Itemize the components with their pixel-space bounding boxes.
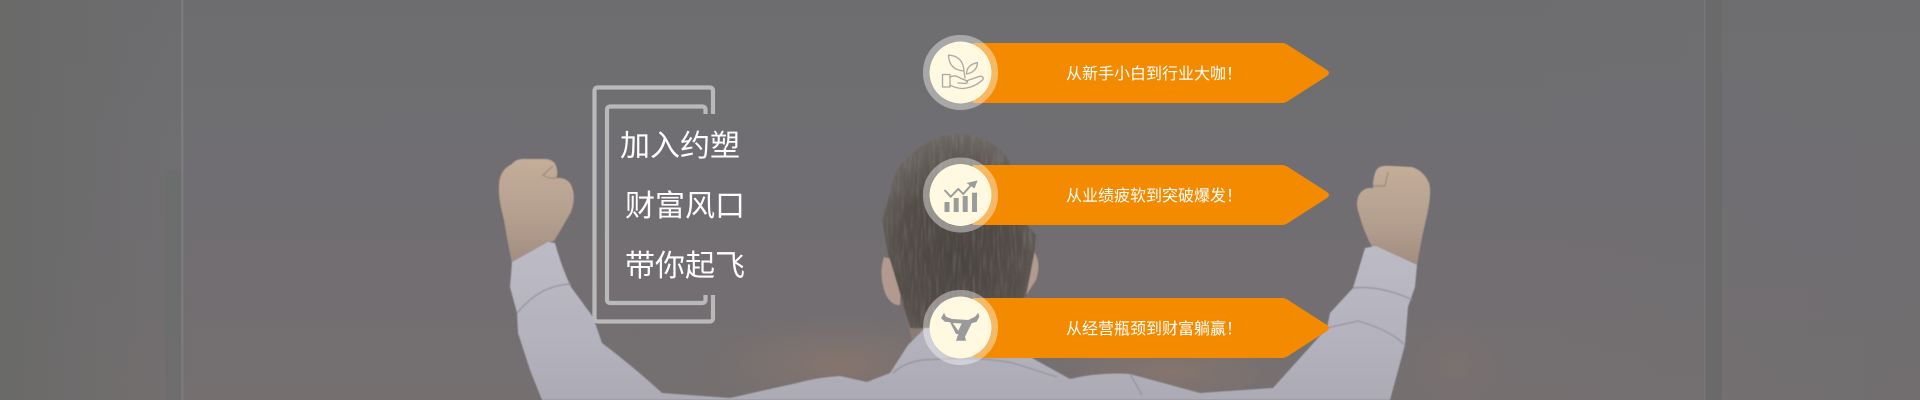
inner bracket frame [607, 106, 706, 303]
outer bracket frame [594, 88, 713, 322]
hair strands [882, 134, 1036, 328]
right ear [1020, 250, 1038, 297]
fist finger shadows [543, 166, 1388, 186]
right fist [1357, 166, 1430, 266]
ribbon text: 从业绩疲软到突破爆发！ [1066, 186, 1242, 205]
left ear [881, 257, 902, 305]
ribbon text: 从经营瓶颈到财富躺赢！ [1066, 320, 1242, 338]
heading text: 加入约塑 [620, 130, 740, 163]
ribbon 1: plant [926, 38, 1329, 107]
ribbon 3: bull [926, 293, 1329, 362]
neck [905, 310, 1020, 340]
heading text: 带你起飞 [625, 250, 745, 283]
photo: man with raised fists [499, 134, 1430, 400]
hair [882, 134, 1036, 328]
ribbon text: 从新手小白到行业大咖！ [1066, 65, 1242, 83]
left fist [499, 159, 574, 263]
sleeve and collar folds [517, 284, 1413, 395]
ribbon 2: growth chart [926, 161, 1329, 229]
icon: hand with plant [942, 55, 983, 88]
icon: bull head [941, 313, 979, 341]
heading text [620, 130, 745, 283]
icon: growth chart [944, 180, 978, 212]
shirt and arms [510, 242, 1417, 400]
heading text: 财富风口 [625, 190, 745, 223]
